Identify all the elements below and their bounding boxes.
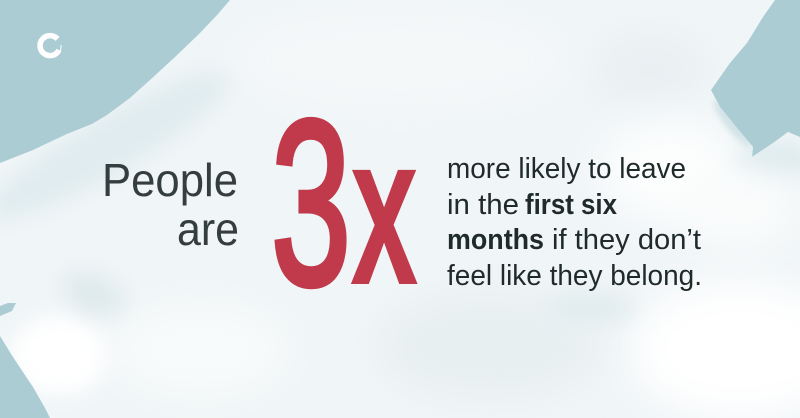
body text: more likely to leave: feel like they belong. — [447, 260, 702, 292]
heading: People are: are — [177, 203, 239, 255]
statistic: 3x: x — [350, 90, 418, 331]
heading: People are: People — [102, 154, 238, 206]
heading: People are — [102, 154, 239, 255]
logo: white circular mark — [40, 36, 61, 57]
body text: more likely to leave: more likely to leave — [447, 153, 686, 185]
body text: more likely to leave: first six — [525, 189, 617, 221]
body text: more likely to leave: if they don’t — [552, 224, 701, 256]
statistic: 3x — [271, 72, 418, 335]
body text: more likely to leave — [447, 153, 702, 292]
body text: more likely to leave: in the — [447, 189, 519, 221]
statistic: 3x: 3 — [271, 72, 351, 335]
body text: more likely to leave: months — [447, 224, 544, 256]
